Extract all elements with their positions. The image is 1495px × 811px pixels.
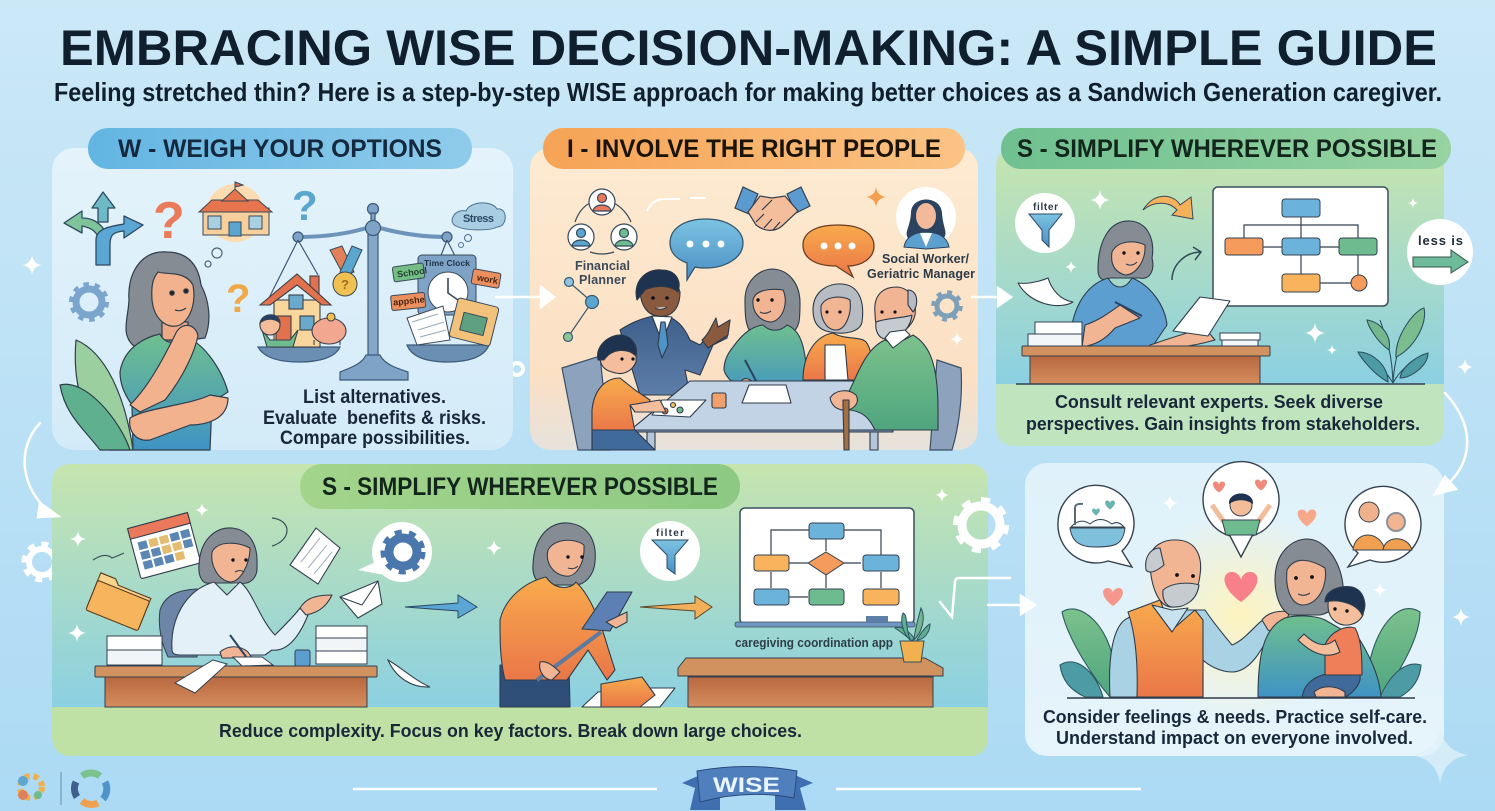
caption band [996, 384, 1444, 446]
tag: work: work [475, 272, 500, 286]
old man [1110, 540, 1290, 697]
icon: less is arrow [1407, 219, 1473, 285]
glow [1130, 510, 1350, 720]
speech bubble: bath [1058, 485, 1134, 567]
caption W: List alternatives. [303, 387, 446, 408]
icon: medal [330, 246, 362, 296]
label: financial planner: Planner [579, 273, 626, 287]
caption E: Consider feelings & needs. Practice self-care. [1043, 706, 1427, 727]
label: financial planner: Financial [575, 259, 630, 273]
table [628, 381, 893, 450]
panel: E empathy [1025, 462, 1444, 756]
icon: curved orange arrow [1143, 196, 1193, 219]
panel background [52, 464, 988, 708]
plant [1358, 308, 1428, 383]
leaves [1060, 609, 1421, 697]
sparkles [1162, 495, 1387, 597]
icon: curved dark arrow [1172, 247, 1201, 280]
man in suit [620, 270, 730, 395]
icon: medal: ? [341, 277, 349, 292]
sweeping woman [500, 523, 675, 707]
icon: flying papers [290, 528, 430, 687]
icon: gear bubble [358, 522, 432, 582]
icon: question marks [153, 182, 318, 321]
plant pot [895, 608, 930, 662]
flowchart whiteboard [735, 508, 915, 627]
panel background [530, 148, 978, 450]
paper [742, 385, 791, 403]
WISE ribbon banner: WISE [713, 774, 780, 797]
heading pill S2: S - SIMPLIFY WHEREVER POSSIBLE [322, 473, 718, 501]
panel background [1025, 463, 1444, 756]
icon: school thought bubble [199, 182, 272, 267]
icon: question marks: ? [226, 277, 250, 321]
arrow: blue [405, 595, 477, 618]
heading pill I [543, 128, 965, 169]
woman [724, 269, 807, 398]
woman thinking [60, 252, 228, 450]
leaf [60, 340, 133, 450]
icon: handshake [735, 187, 810, 230]
panel: S simplify wherever possible (right) [996, 128, 1473, 446]
heading pill W [88, 128, 472, 169]
right desk [678, 658, 943, 707]
icon: calendar [128, 513, 201, 579]
drawing [652, 400, 706, 417]
tag: appshe: appshe [393, 294, 425, 308]
icon: filter: filter [1033, 202, 1058, 213]
heading pill S [1001, 128, 1451, 169]
label: financial planner [575, 259, 630, 287]
icon: stress cloud [452, 203, 505, 248]
caption W [263, 387, 486, 449]
hearts [1103, 510, 1316, 606]
woman with child [1258, 539, 1381, 697]
child [1298, 587, 1365, 697]
icon: stress cloud: Stress [463, 213, 494, 225]
icon: time clock and tags on right pan: Time Clock [424, 258, 470, 268]
boy [592, 335, 666, 450]
caption W: Compare possibilities. [280, 428, 470, 449]
icon: less is arrow: less is [1418, 233, 1463, 248]
icon: three-way arrows [64, 192, 143, 265]
grandfather and grandchild scene [1067, 539, 1415, 698]
icon: social worker portrait [896, 187, 956, 249]
heading pill I: I - INVOLVE THE RIGHT PEOPLE [567, 135, 941, 163]
icon: question marks: ? [292, 182, 318, 229]
tag: school: School [397, 265, 428, 279]
sparkles [1065, 190, 1418, 355]
flowchart board [1213, 187, 1388, 306]
label: caregiving coordination app: caregiving coordination app [735, 636, 893, 650]
speech bubble: grandparents [1345, 486, 1421, 567]
icon: team circle [568, 189, 637, 254]
icon: gear [933, 292, 961, 320]
woman reading at desk [1018, 221, 1230, 348]
grandfather [830, 287, 938, 450]
icon: question marks: ? [153, 192, 185, 250]
arrow: orange [640, 596, 712, 619]
title: EMBRACING WISE DECISION-MAKING: A SIMPLE GUIDE [60, 20, 1437, 76]
footer decorative lines [353, 788, 1141, 790]
label: social worker [867, 252, 975, 281]
caption S: perspectives. Gain insights from stakeholders. [1026, 413, 1420, 434]
icon: gear [71, 284, 107, 320]
label: social worker: Social Worker/ [882, 252, 970, 266]
books and desk [1016, 322, 1425, 384]
scale [258, 204, 489, 380]
icon: house, child and piggy bank on left pan [260, 274, 346, 347]
panel background [52, 148, 513, 450]
icon: filter [640, 521, 700, 581]
icon: time clock and tags on right pan [390, 255, 501, 346]
caption S [1026, 391, 1420, 434]
chair [159, 589, 197, 657]
people at table [592, 269, 938, 450]
caption band [52, 707, 988, 756]
label: social worker: Geriatric Manager [867, 267, 975, 281]
icon: filter: filter [656, 528, 684, 539]
panel background [996, 148, 1444, 385]
logos [18, 772, 107, 805]
panel: I involve the right people [530, 128, 978, 450]
caption S2: Reduce complexity. Focus on key factors. Break down large choices. [219, 720, 802, 741]
cup [712, 393, 726, 408]
icon: squiggle [93, 518, 287, 560]
heading pill S: S - SIMPLIFY WHEREVER POSSIBLE [1017, 135, 1437, 163]
heading pill W: W - WEIGH YOUR OPTIONS [118, 135, 442, 163]
caption E: Understand impact on everyone involved. [1056, 727, 1413, 748]
icon: folder [86, 573, 153, 631]
icon: orange speech bubble [803, 225, 874, 277]
logo right [74, 773, 107, 804]
WISE ribbon banner [682, 766, 813, 810]
heading pill S2 [300, 464, 740, 509]
caption S: Consult relevant experts. Seek diverse [1055, 391, 1383, 412]
connector arrows between panels [25, 287, 1467, 617]
decorative white gear and star in front of panels [935, 488, 1469, 784]
chairs [562, 356, 961, 450]
icon: connected nodes [564, 278, 598, 342]
decorations [647, 187, 964, 346]
panel: W weigh your options [52, 128, 513, 450]
grandmother [803, 284, 873, 380]
stressed woman [172, 528, 332, 658]
speech bubble: child [1203, 462, 1279, 557]
caption E [1043, 706, 1427, 748]
paper stacks and desk [95, 626, 377, 707]
icon: blue speech bubble [670, 219, 743, 280]
icon: filter [1015, 193, 1075, 253]
decorative white shapes behind panels [22, 255, 1473, 626]
sparkles [68, 503, 502, 642]
caption W: Evaluate benefits & risks. [263, 408, 486, 429]
panel: S simplify wherever possible (bottom) [52, 464, 988, 756]
logo left [18, 776, 42, 800]
